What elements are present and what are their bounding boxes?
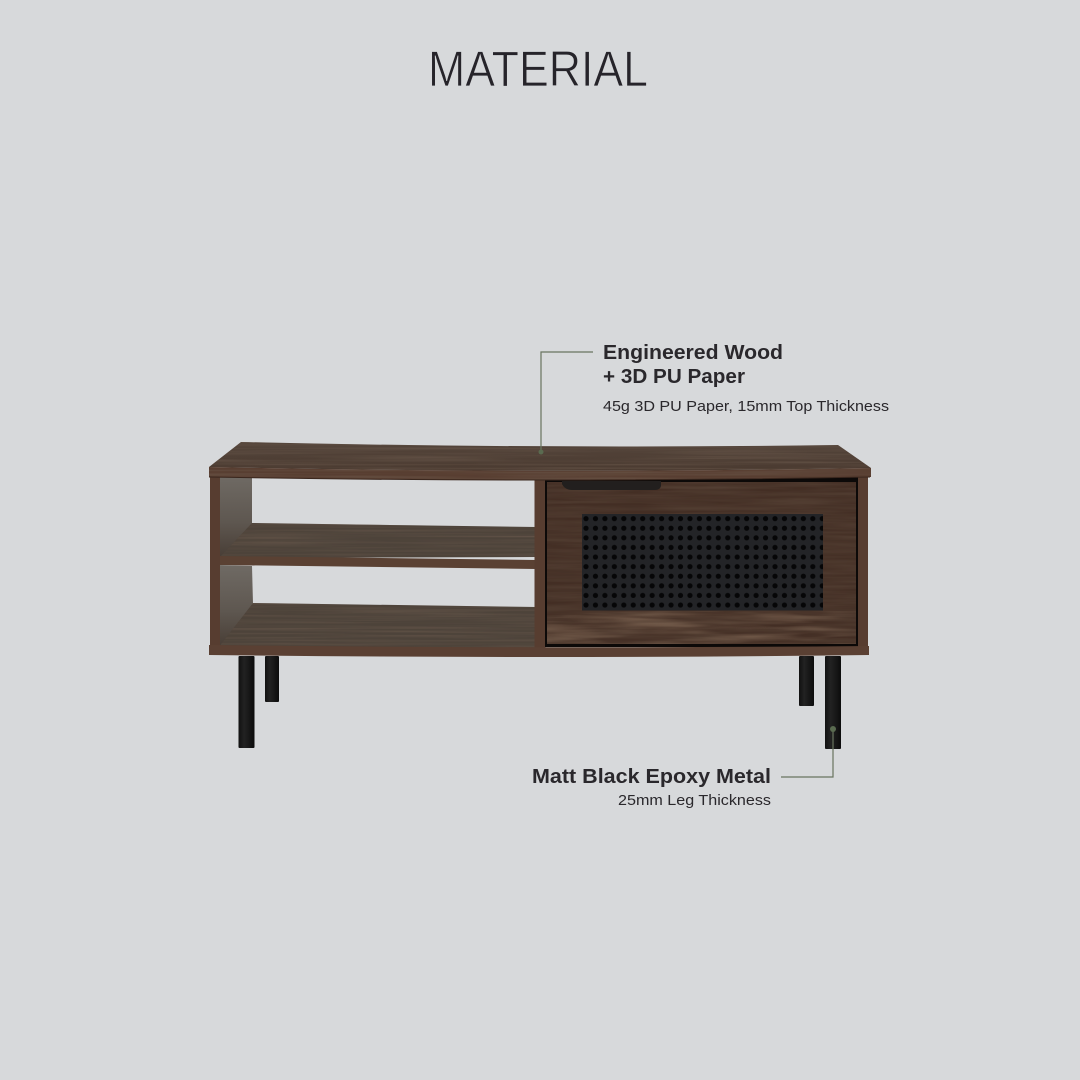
TV console furniture [209,440,871,749]
perforated rattan panel [582,514,823,610]
front right leg [825,656,841,749]
detail text: 45g 3D PU Paper, 15mm Top Thickness [603,398,889,415]
heading second line: + 3D PU Paper [603,366,745,388]
tabletop wood grain [209,442,866,480]
tabletop front edge [209,467,871,480]
middle shelf front edge [220,556,536,569]
callout: matt black epoxy metal [532,726,836,809]
door frame [545,476,858,647]
upper left inner side panel [218,476,252,560]
leader line [541,352,593,452]
tabletop front edge shadow line [209,477,870,480]
left post [210,474,220,648]
right post [857,474,868,648]
bottom shelf surface [218,603,536,649]
back right leg [799,656,814,706]
anchor dot [538,450,544,454]
callout: engineered wood [538,342,889,454]
heading: Matt Black Epoxy Metal [532,766,771,788]
detail text: 25mm Leg Thickness [618,792,771,809]
door wood face [547,482,856,644]
title: MATERIAL [428,41,648,97]
shelf wood grain [218,520,536,650]
lower left inner side panel [218,565,253,649]
door [545,476,858,647]
front left leg [238,656,254,748]
leader line [781,729,833,777]
divider post [534,476,546,649]
door light grain [547,611,856,644]
heading: Engineered Wood [603,342,783,364]
middle shelf surface [219,523,536,558]
door handle [562,481,661,490]
bottom board front edge [209,645,869,657]
back left leg [265,656,279,702]
tabletop surface [209,442,871,471]
door dark grain [547,482,856,644]
anchor dot [830,726,836,732]
